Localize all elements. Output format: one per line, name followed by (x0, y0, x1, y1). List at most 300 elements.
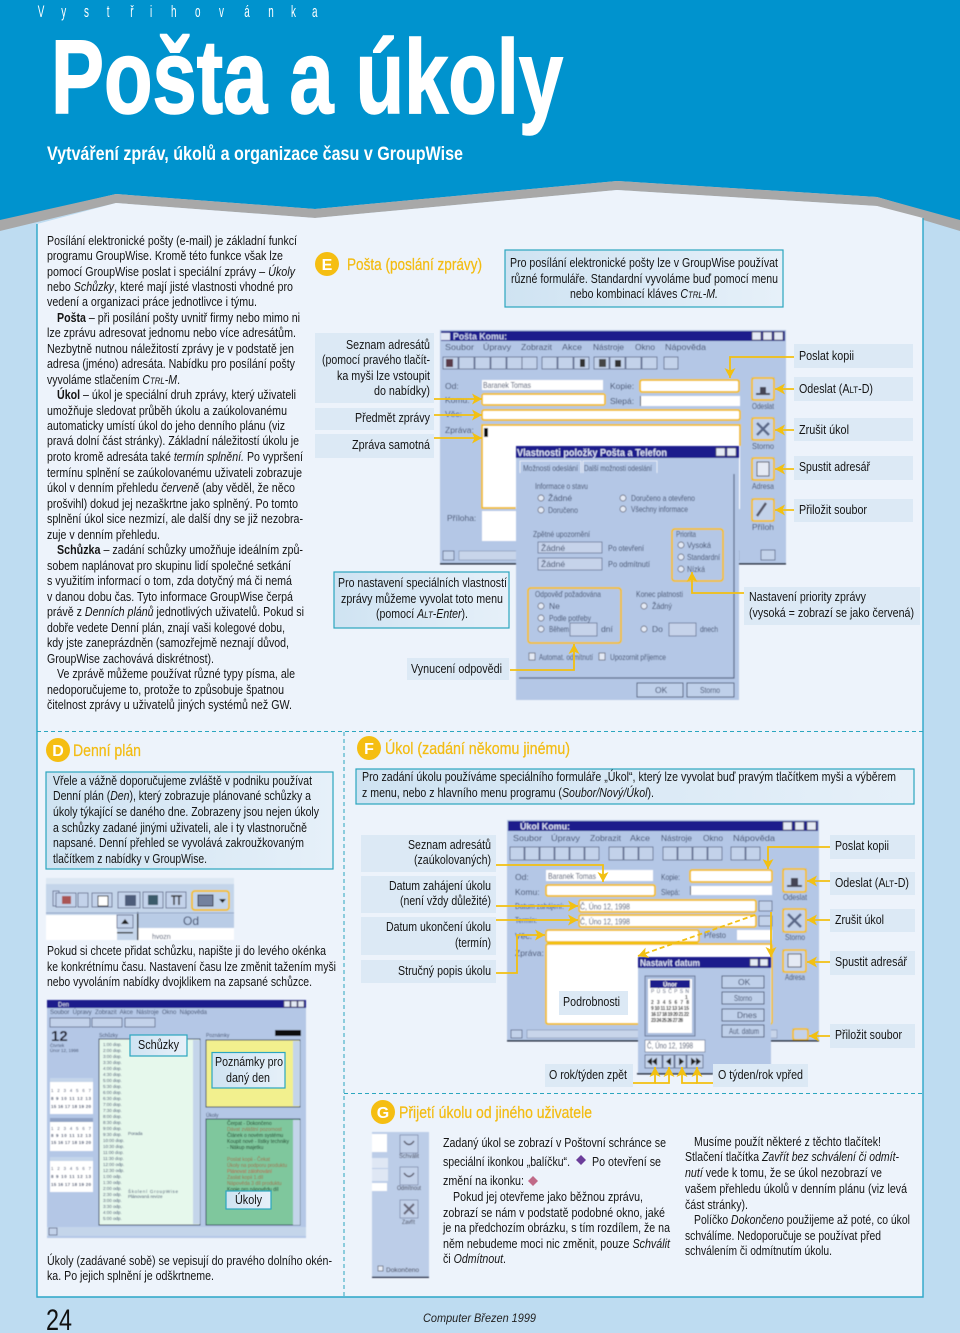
arrows for task window (496, 847, 830, 1083)
screenshot: day planner: 11:00 dop. (103, 1150, 124, 1155)
badge D (46, 738, 70, 762)
screenshot: day planner: 2:00 dop. (103, 1048, 122, 1053)
callout: Denní plán intro: napsané. Denní přehled se vyvolává zakroužkovaným (53, 835, 304, 850)
screenshot: calendar dialog: 9 10 11 12 13 14 15 (651, 1006, 689, 1012)
heading G: Přijetí úkolu od jiného uživatele (399, 1103, 592, 1122)
left labels for mail window: ka myši lze vstoupit (337, 368, 430, 383)
left labels for task window: Datum zahájení úkolu (389, 878, 491, 893)
right labels for mail window: Přiložit soubor (799, 502, 868, 517)
intro article text: Pošta – při posílání pošty uvnitř firmy nebo mimo ni (57, 310, 300, 325)
screenshot: day planner: 8 9 10 11 12 13 (51, 1174, 91, 1179)
screenshot: task window: Slepá: (661, 887, 680, 897)
screenshot: mail window: Odeslat (752, 401, 774, 411)
left labels for mail window: Seznam adresátů (346, 337, 430, 352)
screenshot: properties dialog: Vysoká (687, 540, 711, 550)
screenshot: task window: Úkol Komu: (520, 820, 570, 832)
label: Úkoly (226, 1191, 271, 1209)
left labels for mail window: Předmět zprávy (355, 410, 430, 425)
text: column 2: Stlačení tlačítka Zavřít bez schválení či odmít- (685, 1149, 899, 1164)
screenshot: day planner: 15 16 17 18 19 20 (51, 1140, 91, 1145)
intro article text: Nezbytně nutnou náležitostí zprávy je v podstatě jen (47, 341, 294, 356)
right labels for task window: Poslat kopii (835, 838, 889, 853)
text: column 1 (442, 1135, 671, 1266)
left labels for mail window: (pomocí pravého tlačít- (322, 352, 430, 367)
heading E: Pošta (poslání zprávy) (347, 255, 482, 274)
screenshot: properties dialog: Nízká (687, 564, 705, 574)
screenshot: properties dialog: Možnosti odeslání (523, 463, 579, 473)
screenshot: mail window: Nástroje (593, 342, 624, 352)
intro article text: nebo Schůzky, které mají jisté vlastnosti vhodné pro (47, 279, 293, 294)
callout: Denní plán intro: a schůzky zadané jinými uživateli, ale i ty vlastnoručně (53, 820, 307, 835)
screenshot: day planner: 10:30 dop. (103, 1144, 124, 1149)
screenshot: day planner: 12:00 odp. (103, 1162, 124, 1167)
screenshot: calendar dialog: 1 (685, 995, 688, 1001)
text: úkoly poznámka (47, 1253, 332, 1283)
screenshot: day planner: 9:00 dop. (103, 1126, 122, 1131)
label: Poznámky pro daný den: daný den (226, 1070, 270, 1085)
screenshot: mail window: Akce (562, 342, 582, 352)
screenshot: calendar dialog: 16 17 18 19 20 21 22 (651, 1012, 689, 1018)
left labels for task window: Stručný popis úkolu (398, 963, 491, 978)
screenshot: mail window: Od: (445, 381, 459, 391)
label: Poznámky pro daný den: Poznámky pro (215, 1054, 283, 1069)
screenshot: task window (507, 820, 819, 1042)
left labels for mail window: do nabídky) (374, 383, 430, 398)
intro article text: pravá dolní část stránky). Základní náležitostí úkolu je (47, 433, 299, 448)
right labels for mail window (794, 344, 913, 522)
screenshot: day planner: 1:00 odp. (103, 1174, 122, 1179)
screenshot: task window: Baranek Tomas (548, 871, 596, 881)
screenshot: day planner: 12:30 odp. (103, 1168, 124, 1173)
screenshot: day planner: Koupit nové - lístky techniky (227, 1139, 289, 1145)
right labels for task window: Odeslat (ALT-D) (835, 875, 909, 890)
screenshot: day planner: Článek o novém systému (227, 1132, 283, 1139)
badge G (371, 1100, 395, 1124)
screenshot: day planner: 1 2 3 4 5 6 7 (51, 1088, 91, 1093)
label: Nastavení priority: (vysoká = zobrazí se jako červená) (749, 605, 914, 620)
callout: úkol (356, 769, 914, 804)
label: Schůzky (130, 1035, 187, 1056)
screenshot: day planner: 1 2 3 4 5 6 7 (51, 1166, 91, 1171)
screenshot: mail window: Zobrazit (521, 342, 553, 352)
screenshot: properties dialog: Po otevření (608, 543, 645, 553)
screenshot: calendar dialog: P Ú S Č P S N (651, 988, 689, 995)
left labels for task window: (zaúkolovaných) (414, 852, 491, 867)
screenshot: properties dialog: Doručeno a otevřeno (631, 493, 695, 503)
label: Nastavení priority (744, 587, 920, 625)
screenshot: day planner: Plánovat zálohování (227, 1169, 273, 1175)
screenshot: task window: Věc: (515, 931, 532, 941)
screenshot: day planner: 8 9 10 11 12 13 (51, 1096, 91, 1101)
intro article text: termínu splnění se zaúkolovanému uživateli zobrazuje (47, 465, 302, 480)
right labels for mail window: Spustit adresář (799, 459, 871, 474)
screenshot: day planner: Soubor Úpravy Zobrazit Akce Nástroje Okno Nápověda (50, 1009, 208, 1016)
badge F: F (364, 741, 374, 758)
right labels for task window (830, 835, 915, 1048)
screenshot: properties dialog: Žádné (541, 559, 565, 569)
screenshot: day planner: 5:30 dop. (103, 1084, 122, 1089)
label: Poznámky pro daný den (212, 1052, 285, 1088)
screenshot: day planner: Porada (128, 1131, 143, 1136)
screenshot: mail window: Zpráva: (445, 425, 474, 435)
screenshot: properties dialog: dnech (700, 624, 718, 634)
screenshot: properties dialog: Ne (549, 601, 560, 611)
label: O týden/rok vpřed (713, 1064, 808, 1087)
text: column 2: nutí vede k tomu, že se úkol nezobrazí ve (685, 1165, 882, 1180)
screenshot: task window: Soubor (513, 833, 542, 843)
screenshot: day planner: Poslat kopii - Čekat (227, 1156, 271, 1163)
screenshot: day planner: Čtvrtek (50, 1042, 65, 1048)
screenshot: button strip: Schválit (399, 1154, 419, 1160)
screenshot: calendar dialog: Storno (734, 993, 752, 1003)
intro article text: prošvihl) dokud jej nezaškrtne jako splněný. Po tomto (47, 496, 298, 511)
screenshot: task window: Akce (630, 833, 650, 843)
screenshot: day planner: 11:30 dop. (103, 1156, 124, 1161)
intro article text: Úkol – úkol je speciální druh zprávy, který uživateli (57, 387, 296, 402)
left labels for task window: Seznam adresátů (408, 837, 491, 852)
text: přidání schůzky: ke konkrétnímu času. Nastavení času lze změnit tažením myši (47, 959, 336, 974)
intro article text: zuje v denním přehledu. (47, 527, 160, 542)
screenshot: day planner: Čerpat - Dokončeno (227, 1120, 272, 1127)
text: column 2 (685, 1134, 910, 1258)
screenshot: day planner: Den (58, 1002, 69, 1008)
screenshot: mail window: Komu: (445, 395, 470, 405)
screenshot: task window: Zpráva: (515, 948, 544, 958)
intro article text: vyvoláme stlačením CTRL-M. (47, 372, 180, 387)
intro article text: čitelnost zprávy u uživatelů jiných systémů než GW. (47, 697, 292, 712)
screenshot: button strip: Odmítnout (397, 1186, 421, 1192)
screenshot: mail window: Věc: (445, 409, 462, 419)
text: column 2: vašem přehledu úkolů v denním plánu (viz levá (685, 1181, 908, 1196)
text: přidání schůzky: nebo vyvoláním nabídky dvojklikem na zapsané schůzce. (47, 974, 312, 989)
text: přidání schůzky: Pokud si chcete přidat schůzku, napište ji do levého okénka (47, 943, 327, 958)
callout: Denní plán intro: tlačítkem z nabídky v GroupWise. (53, 851, 207, 866)
label: Schůzky: Schůzky (138, 1037, 179, 1052)
main panel (37, 190, 923, 1297)
label: O týden/rok vpřed: O týden/rok vpřed (718, 1067, 803, 1082)
screenshot: properties dialog: Žádné (548, 493, 572, 503)
screenshot: properties dialog: Všechny informace (631, 504, 688, 514)
screenshot: properties dialog: Během (549, 624, 569, 634)
screenshot: mail window: Adresa (752, 481, 774, 491)
section F: Úkol (zadání někomu jinému) (356, 736, 915, 1087)
section E: Pošta (poslání zprávy) (315, 250, 920, 700)
text: column 2: část stránky). (685, 1197, 748, 1212)
callout: Denní plán intro: Vřele a vážně doporučujeme zvláště v podniku používat (53, 773, 312, 788)
screenshot: button strip: Dokončeno (386, 1267, 419, 1274)
screenshot: properties dialog: Do (652, 624, 663, 634)
screenshot: calendar dialog: OK (738, 977, 751, 987)
screenshot: properties dialog: OK (655, 685, 668, 695)
intro article text: kdy jste zaneprázdněn (samozřejmě neznají důvod, (47, 635, 289, 650)
text: column 1: Po otevření se (592, 1154, 661, 1169)
screenshot: properties dialog: Standardní (687, 552, 721, 562)
screenshot: day planner: 1 2 3 4 5 6 7 (51, 1126, 91, 1131)
screenshot: toolbar crop: hvozn (152, 934, 171, 941)
intro article text: úkol v denním přehledu červeně (aby věděl, že něco (47, 480, 295, 495)
subtitle: Vytváření zpráv, úkolů a organizace času v GroupWise (47, 144, 463, 165)
screenshot: button strip (372, 1132, 429, 1278)
badge E: E (322, 257, 333, 274)
screenshot: mail window: Úpravy (483, 342, 512, 352)
right labels for task window: Spustit adresář (835, 954, 908, 969)
label: Vynucení odpovědi (407, 658, 509, 680)
screenshot: day planner: 8:30 dop. (103, 1120, 122, 1125)
intro article text: dobře vedete Denní plán, znají vaši kolegové dobu, (47, 620, 285, 635)
screenshot: task window: Nástroje (661, 833, 692, 843)
screenshot: task window: Adresa (785, 972, 805, 982)
callout: Alt-Enter: Pro nastavení speciálních vlastností (338, 575, 507, 590)
screenshot: day planner: 3:00 dop. (103, 1054, 122, 1059)
screenshot: calendar dialog: Únor (663, 982, 678, 988)
screenshot: calendar dialog: Dnes (737, 1010, 757, 1020)
text: column 2: Musíme použít některé z těchto tlačítek! (694, 1134, 881, 1149)
label: O rok/týden zpět (545, 1064, 633, 1087)
intro article text: vedení a organizaci práce jednotlivce i týmu. (47, 294, 257, 309)
text: column 1: speciální ikonkou „balíčku“. (443, 1154, 570, 1169)
screenshot: mail window: Nápověda (665, 342, 706, 352)
screenshot: properties dialog: Žádný (652, 601, 673, 611)
intro article text: Ve zprávě můžeme používat různé typy písma, ale (57, 666, 295, 681)
screenshot: day planner: Kopie pro nápovědu díl (227, 1187, 278, 1193)
intro article text: právě z Denních plánů jednotlivých uživatelů. Pokud si (47, 604, 304, 619)
screenshot: mail window: Příloh (752, 522, 774, 532)
screenshot: day planner: 2:30 odp. (103, 1192, 122, 1197)
screenshot: day planner: 4:30 dop. (103, 1072, 122, 1077)
intro article text: Schůzka – zadání schůzky umožňuje ideálním způ- (57, 542, 303, 557)
screenshot: day planner: Dávat zvláštní pozornost (227, 1127, 282, 1133)
screenshot: day planner: Nápověda 3 díl produktu (227, 1181, 282, 1187)
kicker: Vystřihovánka: Vystřihovánka (38, 2, 318, 21)
screenshot: task window: Úpravy (551, 833, 581, 843)
badge E (315, 252, 339, 276)
icon: otevřený balíček (528, 1176, 538, 1186)
screenshot: day planner: 3:00 odp. (103, 1198, 122, 1203)
screenshot: properties dialog: Konec platnosti (636, 589, 683, 599)
screenshot: properties dialog (516, 446, 739, 700)
screenshot: day planner: Úkoly (206, 1112, 219, 1119)
label: Podrobnosti (559, 991, 628, 1015)
left labels for task window: Datum ukončení úkolu (386, 919, 491, 934)
screenshot: properties dialog: Vlastnosti položky Pošta a Telefon (517, 448, 667, 459)
screenshot: task window: Od: (515, 872, 529, 882)
screenshot: day planner: 3:30 odp. (103, 1204, 122, 1209)
screenshot: day planner: 10:00 dop. (103, 1138, 124, 1143)
screenshot: calendar dialog (637, 957, 771, 1074)
intro article text: s využitím informací o tom, zda dotyčný má či nemá (47, 573, 293, 588)
header band (0, 0, 960, 231)
arrows for mail window (434, 357, 794, 670)
intro article text: splnění úkol sice nezmizí, ale další dny se již nezobra- (47, 511, 303, 526)
text: column 1: Pokud jej otevřeme jako běžnou zprávu, (453, 1189, 643, 1204)
screenshot: day planner: 5:00 odp. (103, 1216, 122, 1221)
intro article text: GroupWise zachovává diskrétnost). (47, 651, 214, 666)
intro article text: lze zprávu adresovat jednomu nebo více adresátům. (47, 325, 296, 340)
title: Pošta a úkoly (51, 19, 563, 136)
right labels for task window: Zrušit úkol (835, 912, 884, 927)
screenshot: day planner: 6:30 dop. (103, 1096, 122, 1101)
intro article text: umožňuje sledovat průběh úkolu a zaúkolovanému (47, 403, 287, 418)
screenshot: mail window: Slepá: (610, 396, 634, 406)
callout: Alt-Enter: zprávy můžeme vyvolat toto menu (341, 591, 503, 606)
screenshot: button strip: Zavřít (402, 1220, 415, 1226)
callout: Alt-Enter (334, 572, 509, 628)
text: úkoly poznámka: Úkoly (zadávané sobě) se vepisují do pravého dolního okén- (47, 1253, 332, 1268)
heading F: Úkol (zadání někomu jinému) (385, 739, 570, 758)
callout: Denní plán intro: Denní plán (Den), který zobrazuje plánované schůzky a (53, 788, 312, 803)
right labels for mail window: Odeslat (ALT-D) (799, 381, 873, 396)
screenshot: day planner: 15 16 17 18 19 20 (51, 1104, 91, 1109)
screenshot: day planner: 4:00 odp. (103, 1210, 122, 1215)
badge G: G (377, 1105, 389, 1122)
screenshot: day planner: 2:00 odp. (103, 1186, 122, 1191)
text: column 1: či Odmítnout. (443, 1251, 506, 1266)
text: column 2: schválíme. Nedoporučuje se používat před (685, 1228, 881, 1243)
screenshot: mail window: Pošta Komu: (453, 332, 507, 342)
callout: Denní plán intro (46, 772, 333, 869)
screenshot: day planner: Schůzky (99, 1032, 118, 1039)
text: column 1: Zadaný úkol se zobrazí v Poštovní schránce se (443, 1135, 666, 1150)
intro article text: programu GroupWise. Kromě této funkce však lze (47, 248, 283, 263)
screenshot: day planner: 7:30 dop. (103, 1108, 122, 1113)
screenshot: task window: Nápověda (733, 833, 775, 843)
screenshot: mail window: Příloha: (447, 513, 476, 523)
text: column 1: něm nebudeme moci nic změnit, pouze Schválit (443, 1236, 670, 1251)
screenshot: toolbar crop: Od (183, 914, 199, 928)
screenshot: calendar dialog: 23 24 25 26 27 28 (651, 1018, 683, 1024)
screenshot: day planner: 7:00 dop. (103, 1102, 122, 1107)
intro article text: v danou dobu čas. Tyto informace GroupWise čerpá (47, 589, 294, 604)
screenshot: properties dialog: Odpověď požadována (535, 589, 601, 599)
screenshot: day planner: Únor 12, 1998 (50, 1047, 79, 1053)
callout: formuláře (505, 250, 783, 307)
screenshot: mail window: Soubor (445, 342, 474, 352)
label: O rok/týden zpět: O rok/týden zpět (549, 1067, 627, 1082)
screenshot: task window: Č, Úno 12, 1998 (580, 902, 630, 912)
screenshot: day planner: 1:00 dop. (103, 1042, 122, 1047)
text: column 2: schválením či odmítnutím úkolu. (685, 1243, 832, 1258)
screenshot: properties dialog: Priorita (676, 529, 696, 539)
screenshot: task window: Komu: (515, 887, 540, 897)
screenshot: mail window: Kopie: (610, 381, 634, 391)
label: Podrobnosti: Podrobnosti (563, 994, 620, 1009)
heading D: Denní plán (73, 741, 141, 760)
screenshot: task window: Č, Úno 12, 1998 (580, 916, 630, 926)
screenshot: day planner: 5:00 dop. (103, 1078, 122, 1083)
intro article text: sobem naplánovat pro skupinu lidí společné setkání (47, 558, 291, 573)
screenshot: day planner: 3:30 dop. (103, 1060, 122, 1065)
callout: Alt-Enter: (pomocí ALT-Enter). (376, 606, 468, 621)
screenshot: properties dialog: Zpětné upozornění (533, 529, 591, 539)
right labels for task window: Přiložit soubor (835, 1027, 903, 1042)
screenshot: calendar dialog: Nastavit datum (640, 958, 700, 968)
intro article text: pomocí GroupWise poslat i speciální zprávy – Úkoly (47, 264, 296, 279)
callout: úkol: z menu, nebo z hlavního menu programu (Soubor/Nový/Úkol). (362, 785, 654, 800)
icon: balíček (576, 1155, 586, 1165)
screenshot: task window: Odeslat (783, 892, 808, 902)
intro article text: Posílání elektronické pošty (e-mail) je základní funkcí (47, 233, 297, 248)
badge F (357, 736, 381, 760)
left labels for task window: (termín) (455, 935, 491, 950)
screenshot: calendar dialog: Aut. datum (729, 1026, 759, 1036)
screenshot: mail window: Baranek Tomas (483, 380, 531, 390)
text: column 1: změní na ikonku: (443, 1173, 524, 1188)
intro article text: nedoporučujeme to, protože to způsobuje špatnou (47, 682, 284, 697)
intro article text: adresa (jméno) adresáta. Nabídku pro posílání pošty (47, 356, 295, 371)
screenshot: mail window (440, 330, 786, 564)
left labels for task window: (není vždy důležité) (400, 893, 491, 908)
label: Vynucení odpovědi: Vynucení odpovědi (411, 661, 502, 676)
screenshot: day planner: 1:30 odp. (103, 1180, 122, 1185)
badge D: D (52, 743, 64, 760)
screenshot: task window: Termín: (515, 915, 537, 925)
screenshot: calendar dialog: Č, Úno 12, 1998 (647, 1040, 693, 1050)
screenshot: toolbar crop (46, 878, 234, 941)
right labels for mail window: Zrušit úkol (799, 422, 849, 437)
screenshot: day planner: - Nákup majetku (227, 1145, 264, 1151)
left labels for task window (361, 835, 496, 983)
label: Úkoly: Úkoly (235, 1192, 263, 1207)
screenshot: day planner: 12 (51, 1028, 68, 1045)
screenshot: properties dialog: Upozornit příjemce (610, 652, 666, 662)
screenshot: day planner: 8 9 10 11 12 13 (51, 1133, 91, 1138)
screenshot: day planner: Zaslat kopii 1.díl (227, 1175, 263, 1181)
left labels for mail window (315, 333, 434, 458)
text: přidání schůzky (47, 943, 336, 989)
text: column 2: Políčko Dokončeno použijeme až poté, co úkol (694, 1212, 910, 1227)
screenshot: day planner (47, 1000, 306, 1238)
intro article text: automaticky umístí úkol do jeho denního plánu (viz (47, 418, 285, 433)
screenshot: task window: Kopie: (661, 872, 680, 882)
text: column 1: je na předchozím obrázku, s tím rozdílem, že na (442, 1220, 671, 1235)
screenshot: properties dialog: Automat. odmítnutí (539, 652, 593, 662)
screenshot: day planner: Poznámky (206, 1033, 230, 1039)
screenshot: task window: Přesto (704, 930, 726, 940)
right labels for mail window: Poslat kopii (799, 348, 854, 363)
screenshot: properties dialog: Po odmítnutí (608, 559, 651, 569)
left labels for mail window: Zpráva samotná (352, 437, 431, 452)
screenshot: day planner: Školení GroupWise (128, 1188, 178, 1194)
screenshot: properties dialog: Informace o stavu (535, 481, 588, 491)
text: column 1: zobrazí se nám v podstatě podobné okno, jaké (443, 1205, 665, 1220)
screenshot: task window: Zobrazit (590, 833, 622, 843)
screenshot: task window: Okno (703, 833, 723, 843)
screenshot: day planner: 8:00 dop. (103, 1114, 122, 1119)
text: úkoly poznámka: ka. Po jejich splnění je odškrtneme. (47, 1268, 214, 1283)
screenshot: properties dialog: Storno (700, 685, 720, 695)
callout: Denní plán intro: úkoly týkající se daného dne. Zobrazeny jsou nejen úkoly (53, 804, 319, 819)
label: Nastavení priority: Nastavení priority zprávy (749, 589, 866, 604)
screenshot: day planner: 6:00 dop. (103, 1090, 122, 1095)
screenshot: task window: Datum zahájení: (515, 901, 564, 911)
screenshot: calendar dialog: 2 3 4 5 6 7 8 (651, 1000, 689, 1006)
section G: Přijetí úkolu od jiného uživatele (371, 1100, 910, 1278)
screenshot: properties dialog: Doručeno (548, 505, 578, 515)
screenshot: day planner: Plánovaná revize (128, 1194, 163, 1199)
screenshot: properties dialog: dní (601, 624, 613, 634)
intro article text (47, 233, 304, 712)
screenshot: properties dialog: Další možnosti odeslání (584, 463, 652, 473)
intro article text: proto kromě adresáta také termín splnění. Po vypršení (47, 449, 303, 464)
screenshot: day planner: 15 16 17 18 19 20 (51, 1182, 91, 1187)
section D: Denní plán (46, 738, 336, 1283)
screenshot: day planner: 9:30 dop. (103, 1132, 122, 1137)
callout: formuláře: nebo kombinací kláves CTRL-M. (570, 286, 718, 301)
footer: source: Computer Březen 1999 (423, 1311, 536, 1325)
screenshot: properties dialog: Podle potřeby (549, 613, 592, 623)
callout: formuláře: Pro posílání elektronické pošty lze v GroupWise používat (510, 255, 778, 270)
screenshot: mail window: Storno (752, 441, 774, 451)
